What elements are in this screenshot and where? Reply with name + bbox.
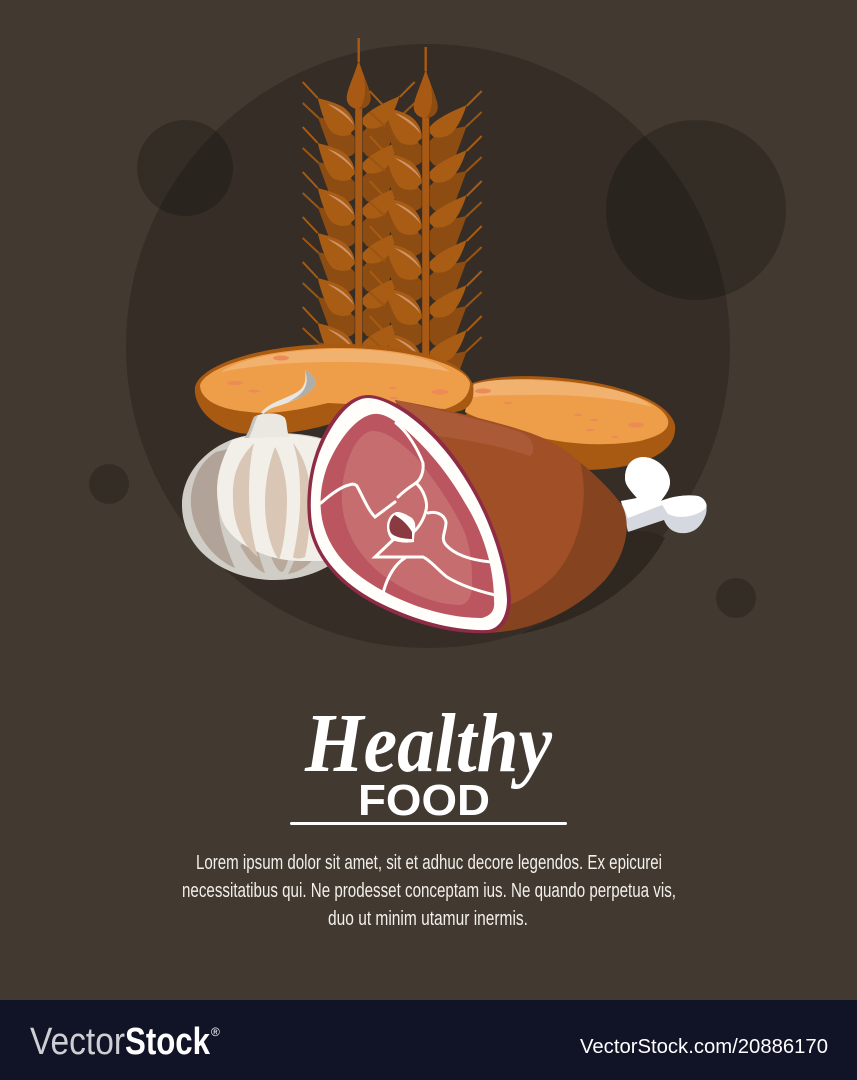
footer logo: Stock bbox=[125, 1021, 211, 1063]
title: FOOD: FOOD bbox=[358, 776, 490, 825]
lighter meat centre bbox=[342, 431, 472, 605]
cut face rim bbox=[307, 395, 511, 633]
ham upper highlight bbox=[395, 400, 584, 605]
large circle top right bbox=[606, 120, 786, 300]
title: Healthy: Healthy bbox=[304, 697, 553, 790]
small dot left bbox=[89, 464, 129, 504]
small dot right bbox=[716, 578, 756, 618]
body text: necessitatibus qui. Ne prodesset conceptam ius. Ne quando perpetua vis, bbox=[182, 880, 676, 902]
meat veins bbox=[321, 423, 495, 598]
icon: ham bone bbox=[621, 457, 707, 533]
title underline bbox=[290, 822, 567, 825]
cut face fat bbox=[311, 398, 507, 630]
large dark circle bbox=[126, 44, 730, 648]
footer logo: Vector bbox=[30, 1021, 125, 1063]
footer bar bbox=[0, 1000, 857, 1080]
cut face meat bbox=[321, 414, 494, 618]
icon: garlic bulb bbox=[182, 370, 340, 580]
icon: back bread slice bbox=[465, 376, 675, 470]
bone cross-section bbox=[387, 512, 415, 543]
body text: Lorem ipsum dolor sit amet, sit et adhuc decore legendos. Ex epicurei bbox=[196, 852, 662, 874]
body text bbox=[182, 852, 676, 930]
icon: wheat ears bbox=[303, 38, 482, 397]
footer logo: ® bbox=[211, 1025, 220, 1039]
icon: ham bbox=[307, 395, 627, 633]
ham sheen bbox=[395, 400, 533, 456]
footer logo bbox=[30, 1021, 220, 1063]
body text: duo ut minim utamur inermis. bbox=[328, 908, 528, 930]
footer url: VectorStock.com/20886170 bbox=[580, 1036, 828, 1058]
ham body bbox=[395, 400, 627, 633]
icon: front bread slice bbox=[195, 344, 473, 435]
ham shadow bbox=[520, 531, 665, 634]
small circle top left bbox=[137, 120, 233, 216]
